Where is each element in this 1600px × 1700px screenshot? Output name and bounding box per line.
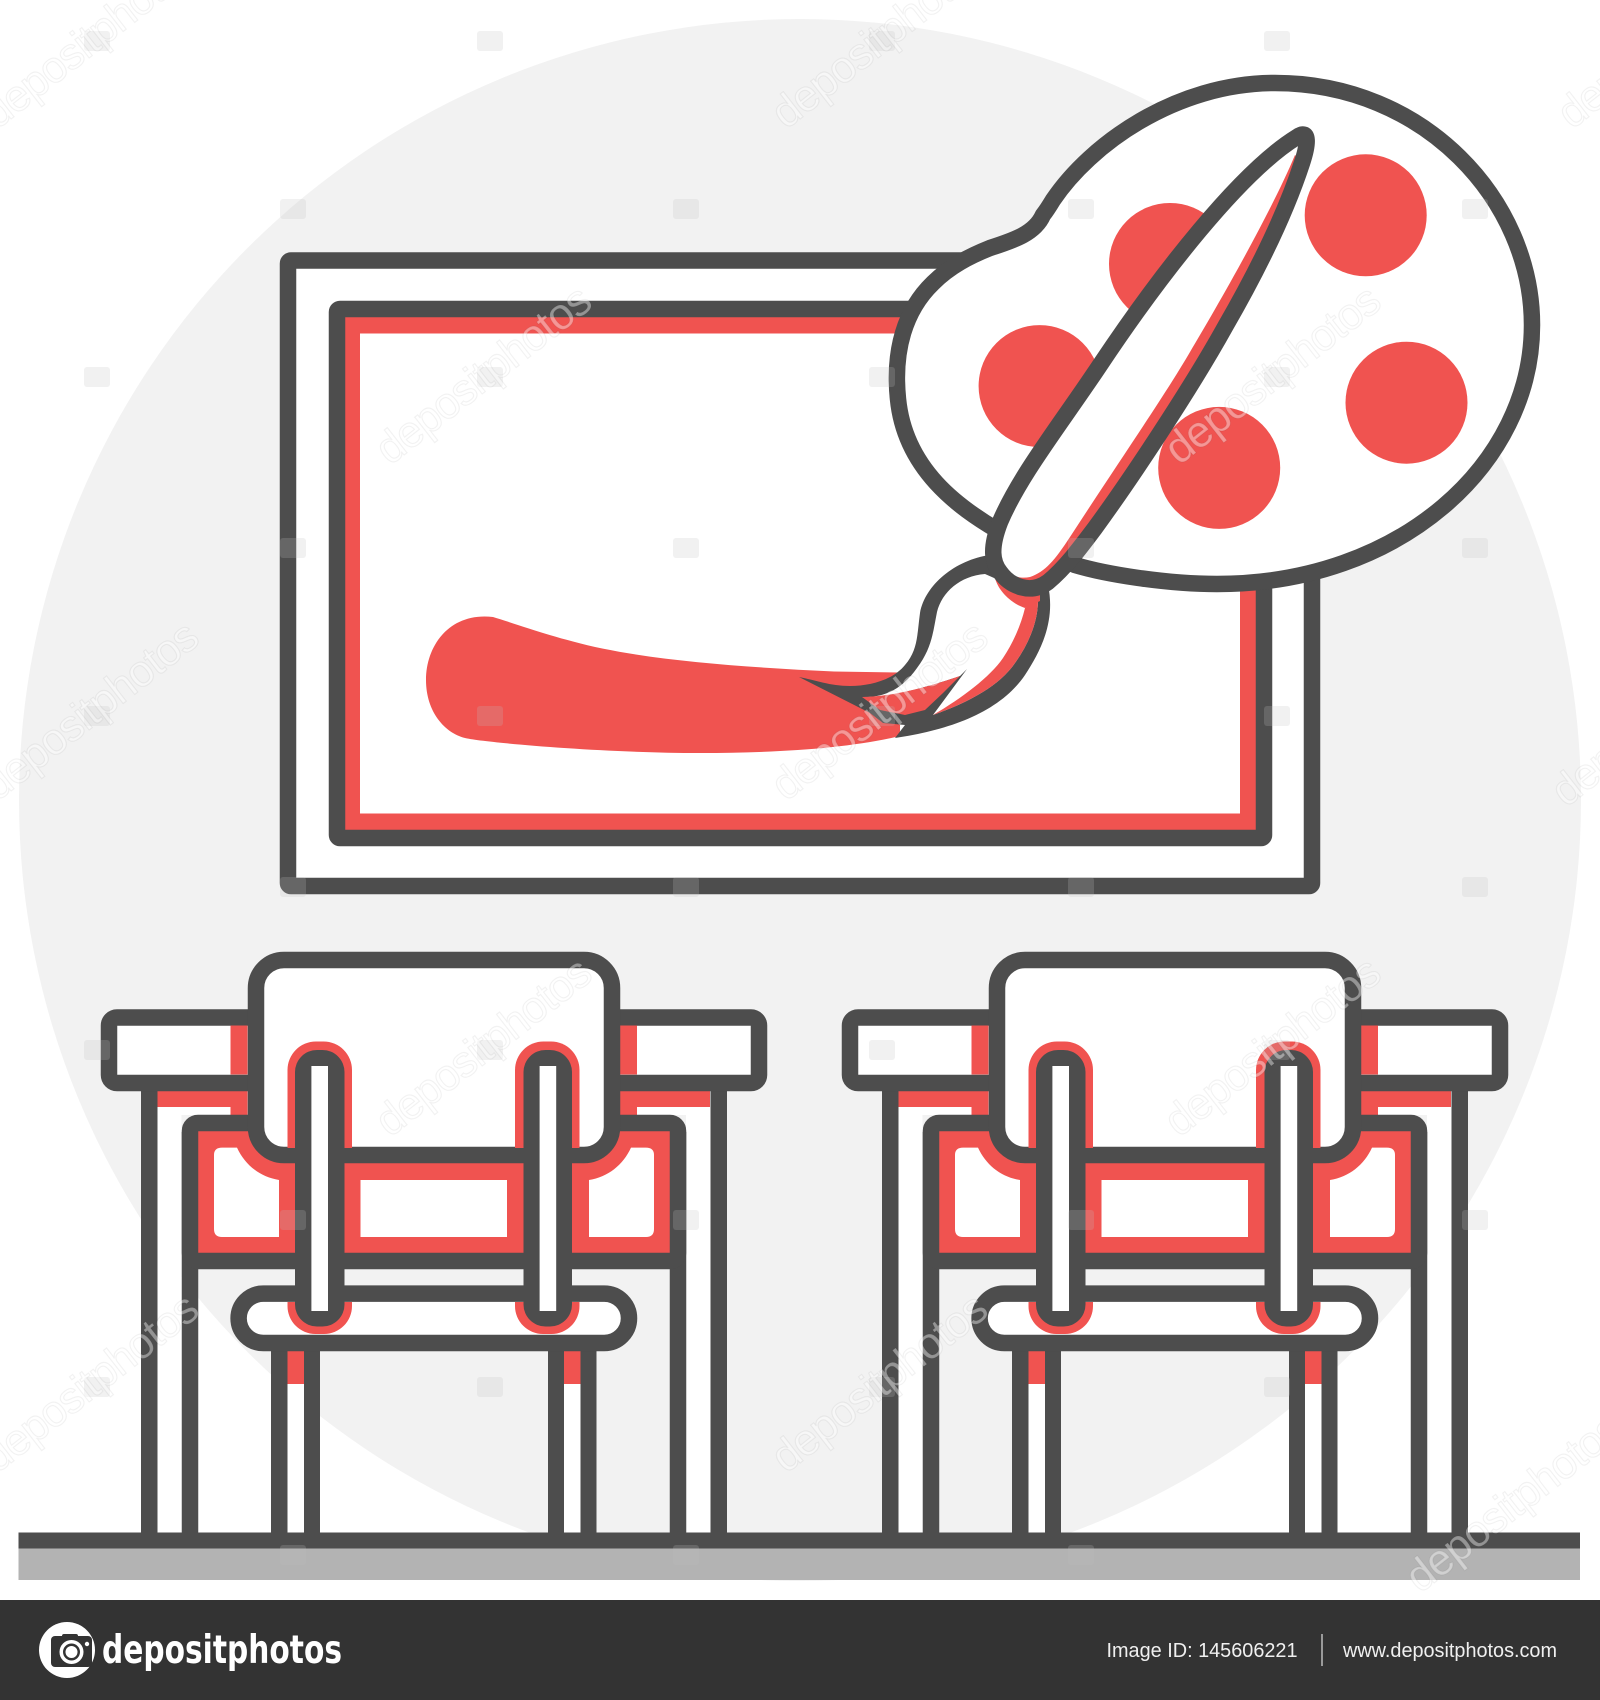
footer bar <box>0 1600 1600 1700</box>
website url: www.depositphotos.com <box>1342 1640 1557 1662</box>
logo icon: camera <box>39 1622 95 1678</box>
watermark text: depositphotos <box>1155 275 1390 474</box>
image id: Image ID: 145606221 <box>1106 1640 1298 1662</box>
watermark text: depositphotos <box>366 947 601 1146</box>
canvas <box>360 334 1240 814</box>
watermark cameras <box>84 31 1488 1565</box>
floor <box>18 1532 1580 1580</box>
watermark text: depositphotos <box>1155 947 1390 1146</box>
watermark text: depositphotos <box>762 611 997 810</box>
brush handle <box>993 135 1307 592</box>
left desk and chair <box>109 960 759 1537</box>
watermark text: depositphotos <box>762 1283 997 1482</box>
logo wordmark: depositphotos <box>102 1628 342 1673</box>
right desk and chair <box>850 960 1500 1537</box>
outer frame <box>288 260 1312 886</box>
watermark text: depositphotos <box>366 275 601 474</box>
paint brush bristles <box>799 555 1050 738</box>
picture frame on wall <box>288 260 1312 886</box>
inner frame with red border <box>337 309 1264 838</box>
red paint stroke <box>426 616 900 753</box>
palette with paint dots <box>897 83 1532 584</box>
